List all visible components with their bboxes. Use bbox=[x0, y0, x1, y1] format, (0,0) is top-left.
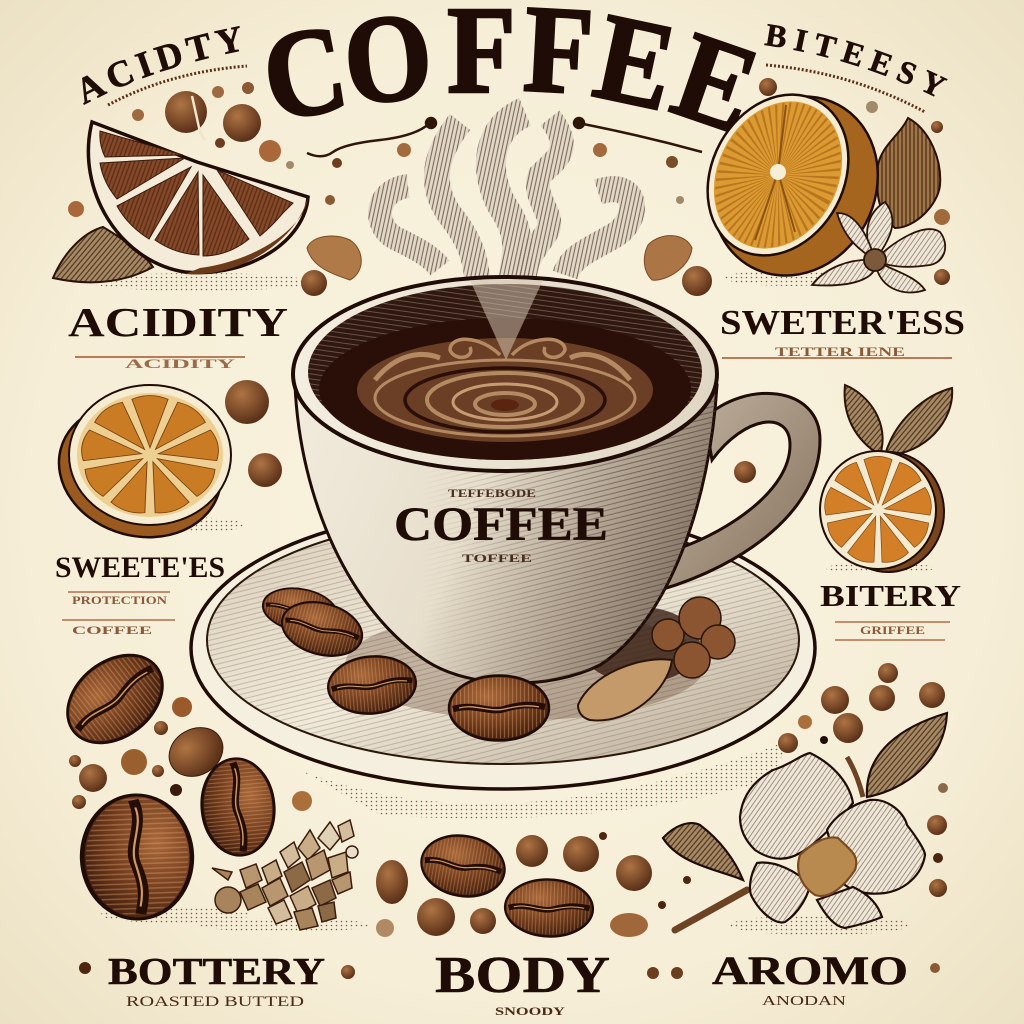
icon: top right flower bbox=[812, 202, 945, 292]
coffee surface bbox=[308, 280, 702, 460]
label: bitterness right: BITERY bbox=[820, 578, 961, 613]
cup label caption: TOFFEE bbox=[462, 551, 532, 565]
icon: top left citrus wedge bbox=[53, 122, 310, 291]
caption: sweetness right: TETTER IENE bbox=[775, 344, 905, 359]
icon: left half orange bbox=[44, 385, 245, 555]
decorative flourish right bbox=[574, 118, 702, 204]
caption: sweetness left: PROTECTION bbox=[72, 593, 167, 607]
label: acidity: ACIDITY bbox=[68, 299, 288, 345]
cup rim bbox=[293, 277, 717, 471]
label: buttery: BOTTERY bbox=[108, 951, 325, 993]
heading: acidity arc: ACIDTY bbox=[82, 26, 240, 105]
icon: specks left bbox=[225, 380, 282, 487]
icon: round specks top right bbox=[644, 78, 950, 296]
caption: bitterness right bbox=[835, 622, 950, 640]
caption: acidity: ACIDITY bbox=[125, 356, 236, 371]
cup label caption bbox=[448, 486, 536, 565]
caption: buttery: ROASTED BUTTED bbox=[126, 994, 304, 1010]
saucer bbox=[191, 507, 815, 818]
icon: large flower bbox=[663, 713, 947, 935]
title: C bbox=[253, 0, 357, 148]
beans on saucer bbox=[259, 583, 549, 740]
almond bbox=[578, 659, 672, 720]
icon: top left nuts and specks bbox=[68, 82, 342, 217]
caption: sweetness left bbox=[62, 592, 175, 637]
label: sweetness left: SWEETE'ES bbox=[55, 551, 225, 584]
small bean near handle bbox=[734, 461, 756, 483]
cup label: COFFEE bbox=[394, 498, 608, 551]
caption: aroma: ANODAN bbox=[762, 994, 846, 1009]
icon: top right half orange bbox=[680, 67, 909, 305]
decorative flourish left bbox=[307, 118, 436, 157]
icon: lower nut left bbox=[301, 236, 361, 296]
caption: body: SNOODY bbox=[495, 1004, 565, 1018]
handle bbox=[660, 393, 820, 590]
cup body bbox=[295, 385, 717, 683]
heading: bitterness arc: BITEESY bbox=[764, 24, 948, 97]
icon: specks right bbox=[647, 663, 948, 979]
title: E bbox=[658, 5, 774, 160]
icon: top right onion fruit bbox=[877, 118, 940, 228]
walnut bbox=[652, 597, 735, 678]
icon: crushed coffee pile bbox=[200, 820, 370, 932]
label: body: BODY bbox=[435, 947, 610, 1004]
icon: right orange with leaves bbox=[820, 385, 952, 573]
cup label caption: TEFFEBODE bbox=[448, 486, 536, 500]
icon: left beans group bbox=[51, 637, 355, 979]
icon: bottom beans group bbox=[376, 829, 652, 938]
label: sweetness right: SWETER'ESS bbox=[720, 303, 965, 342]
label: aroma: AROMO bbox=[712, 948, 908, 993]
caption: bitterness right: GRIFFEE bbox=[860, 623, 925, 637]
caption: sweetness left: COFFEE bbox=[72, 623, 152, 637]
steam bbox=[380, 112, 632, 295]
title bbox=[253, 0, 774, 160]
